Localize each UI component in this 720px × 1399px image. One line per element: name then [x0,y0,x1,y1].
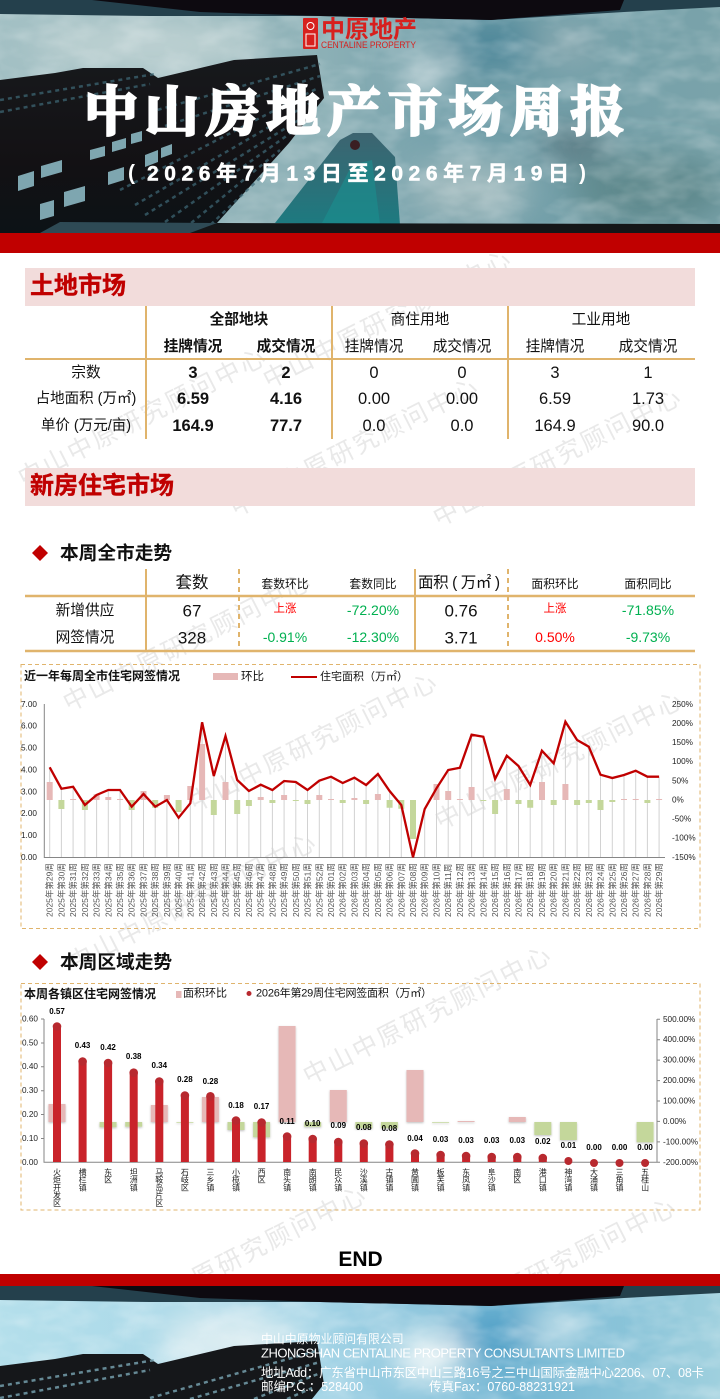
district labels: 三角镇 [615,1168,624,1192]
week labels: 2026年第03周 [349,863,359,917]
table values: 2 [281,364,291,382]
chart legend: 面积环比 [183,986,227,1000]
week labels: 2026年第08周 [408,863,418,917]
title: 中山房地产市场周报 [84,70,631,146]
district labels: 古镇镇 [385,1167,394,1192]
week labels: 2026年第02周 [338,863,348,917]
table group headers: 成交情况 [619,337,678,355]
week labels: 2025年第35周 [115,863,125,917]
row: online signing: 网签情况 [56,629,115,646]
week labels: 2026年第12周 [455,863,465,917]
week labels: 2026年第05周 [373,863,383,917]
area columns [53,1026,547,1162]
week labels: 2026年第15周 [490,863,500,917]
left axis labels: 3.00 [21,787,37,796]
right axis labels: 100.00% [663,1096,695,1106]
week labels: 2025年第31周 [68,863,78,917]
right axis labels: -200.00% [663,1158,698,1167]
table group headers: 全部地块 [210,310,269,328]
week labels: 2026年第07周 [396,863,406,917]
right axis labels: 300.00% [663,1056,695,1065]
district labels: 沙溪镇 [359,1168,368,1192]
week labels: 2025年第47周 [256,863,266,917]
district labels: 三乡镇 [206,1168,215,1192]
value labels: 0.11 [280,1117,295,1126]
week labels: 2026年第23周 [584,863,594,917]
section heading: land market [25,268,695,306]
week labels: 2025年第37周 [138,863,148,917]
right axis labels: 50% [672,776,688,785]
footer buildings [0,1286,720,1399]
value labels: 0.28 [177,1075,193,1084]
district labels: 坦洲镇 [129,1168,138,1192]
week labels: 2026年第28周 [642,863,652,917]
axes [41,1019,660,1162]
watermark: 中山中原研究顾问中心 [59,567,317,717]
row: online signing: 328 [178,628,206,648]
row: online signing: -0.91% [263,629,307,645]
value labels: 0.02 [535,1137,551,1146]
district labels: 马鞍岛片区 [155,1168,164,1207]
negative change bars [100,1122,654,1142]
district labels: 西区 [257,1168,266,1184]
table values: 4.16 [270,390,302,408]
left axis labels: 0.20 [22,1110,38,1119]
value labels: 0.17 [254,1102,270,1111]
section heading: land market: 土地市场 [30,272,126,300]
right axis labels: 0% [672,796,684,804]
district labels: 阜沙镇 [487,1167,496,1192]
week labels: 2025年第42周 [197,863,207,917]
week labels: 2026年第01周 [326,863,336,917]
logo: CENTALINE PROPERTY [321,40,417,51]
row: online signing: 3.71 [444,628,478,648]
table row labels [36,363,136,434]
district labels: 大涌镇 [590,1167,598,1192]
value labels [49,1007,653,1152]
week labels: 2025年第38周 [150,863,160,917]
chart panel: weekly city signing [20,664,700,929]
chart legend [213,669,408,683]
right axis labels: 100% [672,757,693,766]
footer banner [0,1286,720,1399]
table values: 0.00 [446,390,478,408]
week labels: 2025年第52周 [314,863,324,917]
table headers: 面积同比 [624,577,672,591]
left axis labels: 7.00 [21,700,37,709]
week labels: 2026年第21周 [560,863,570,917]
value labels: 0.03 [433,1135,449,1144]
week labels: 2026年第04周 [361,863,371,917]
week labels: 2025年第51周 [302,863,312,917]
table group headers: 挂牌情况 [526,338,585,355]
district labels: 横栏镇 [78,1167,87,1192]
week labels: 2026年第11周 [443,864,453,917]
week labels: 2025年第49周 [279,863,289,917]
footer company text: ZHONGSHAN CENTALINE PROPERTY CONSULTANTS LIMITED [261,1346,625,1360]
footer company text [261,1332,704,1394]
value labels: 0.57 [49,1007,65,1016]
footer company text: 中山中原物业顾问有限公司 [261,1332,404,1346]
chart legend [176,986,432,1000]
value labels: 0.03 [458,1136,474,1145]
table values: 0 [369,364,379,382]
district labels [52,1167,650,1207]
left axis labels: 0.60 [22,1014,38,1024]
value labels: 0.01 [561,1141,577,1150]
watermark: 中山中原研究顾问中心 [226,372,484,522]
table row labels: 占地面积 (万㎡) [36,390,136,407]
value labels: 0.43 [75,1041,91,1050]
negative change bars [58,800,650,839]
end marker: END [338,1248,383,1271]
right axis labels: -150% [672,853,696,862]
chart legend: 住宅面积（万㎡） [320,669,408,683]
value labels: 0.00 [637,1143,653,1152]
header banner [0,0,720,233]
week labels: 2025年第34周 [103,863,113,917]
week labels: 2025年第50周 [291,863,301,917]
week labels: 2025年第44周 [220,863,230,917]
district labels: 神湾镇 [564,1167,573,1192]
table row labels: 宗数 [71,363,101,381]
watermark: 中山中原研究顾问中心 [429,382,687,532]
table row labels: 单价 (万元/亩) [41,416,131,434]
chart title: 近一年每周全市住宅网签情况 [24,668,180,683]
table values: 1.73 [632,390,664,408]
week labels: 2025年第39周 [162,863,172,917]
row: new supply: -71.85% [622,602,674,618]
week labels: 2026年第19周 [537,863,547,917]
watermark: 中山中原研究顾问中心 [14,342,272,492]
district labels: 小榄镇 [232,1168,240,1192]
date range: ) [579,162,586,184]
week labels: 2026年第18周 [525,863,535,917]
chart title: 本周各镇区住宅网签情况 [24,986,156,1001]
row: online signing: -9.73% [626,629,670,645]
value labels: 0.10 [305,1119,321,1128]
district labels: 南头镇 [283,1167,292,1192]
district labels: 东凤镇 [462,1167,471,1192]
table headers: 套数环比 [261,577,309,591]
right axis labels [663,1015,698,1167]
table values: 3 [188,364,198,382]
footer company text: 地址Add：广东省中山市东区中山三路16号之三中山国际金融中心2206、07、08卡 [261,1365,704,1380]
watermark: 中山中原研究顾问中心 [64,827,322,977]
right axis labels: 500.00% [663,1015,695,1024]
footer company text: 传真Fax：0760-88231921 [429,1379,575,1394]
left axis labels: 0.10 [22,1134,38,1143]
week labels: 2025年第45周 [232,863,242,917]
left axis labels: 0.00 [21,853,37,862]
value labels: 0.34 [152,1061,168,1070]
left axis labels: 4.00 [21,766,37,774]
district labels: 石岐区 [180,1168,189,1191]
footer company text: 邮编P.C.：528400 [261,1379,363,1394]
positive change bars [47,744,662,800]
watermark: 中山中原研究顾问中心 [185,667,443,817]
week labels: 2025年第48周 [267,863,277,917]
table group headers: 工业用地 [572,311,631,328]
week labels: 2026年第17周 [514,863,524,917]
week labels [45,863,664,917]
table headers: 面积 ( 万㎡ ) [418,574,500,592]
table group headers: 成交情况 [433,337,492,355]
city trend table [25,569,695,652]
district labels: 火炬开发区 [52,1168,62,1207]
left axis labels: 5.00 [21,744,37,752]
right axis labels: -100.00% [663,1137,698,1146]
row: new supply: 67 [183,602,201,620]
left axis labels: 0.30 [22,1086,38,1095]
table values: 3 [550,364,560,382]
table headers [176,573,672,592]
table values: 77.7 [270,417,302,435]
subheading: city trend: 本周全市走势 [60,542,172,564]
left axis labels [22,1014,38,1167]
left axis labels: 6.00 [21,722,37,731]
table values [172,364,664,435]
right axis labels: 200.00% [663,1076,695,1085]
axes [44,704,665,858]
table group headers: 挂牌情况 [164,337,223,355]
chart legend: 2026年第29周住宅网签面积（万㎡） [256,986,432,1000]
value labels: 0.00 [586,1143,602,1152]
week labels: 2026年第13周 [467,863,477,917]
week labels: 2026年第06周 [385,863,395,917]
row: new supply: 新增供应 [56,601,115,619]
week labels: 2025年第30周 [56,863,66,917]
table group headers: 挂牌情况 [345,338,404,355]
area dots [53,1022,649,1167]
date range: ( [128,162,135,184]
week labels: 2026年第10周 [432,863,442,917]
week labels: 2026年第16周 [502,863,512,917]
subheading: district trend: 本周区域走势 [60,952,172,972]
week labels: 2026年第20周 [549,863,559,917]
table values: 0.0 [451,417,473,435]
left axis labels [21,700,37,862]
date range: 2026年7月13日至2026年7月19日 [147,162,569,186]
right axis labels [672,700,696,862]
chart panel: district signing [20,983,700,1210]
watermark: 中山中原研究顾问中心 [299,940,557,1090]
value labels: 0.00 [612,1143,628,1152]
district labels: 黄圃镇 [410,1167,420,1192]
logo: 中原地产 [321,16,417,44]
week labels: 2026年第27周 [631,863,641,917]
chart legend: 环比 [241,670,264,683]
row: new supply: 上涨 [274,602,297,615]
value labels: 0.04 [407,1134,423,1143]
row: new supply: -72.20% [347,602,399,618]
week labels: 2026年第25周 [607,863,617,917]
table group headers: 成交情况 [257,337,316,355]
week labels: 2025年第33周 [92,863,102,917]
right axis labels: -100% [672,834,696,843]
value labels: 0.08 [356,1123,372,1132]
district labels: 南区 [513,1167,522,1184]
left axis labels: 0.40 [22,1062,38,1071]
district labels: 南朗镇 [308,1167,317,1192]
right axis labels: -50% [672,814,691,824]
value labels: 0.28 [203,1077,219,1086]
left axis labels: 0.00 [22,1158,38,1167]
table headers: 套数同比 [349,577,397,591]
logo [303,16,417,51]
district labels: 五桂山 [641,1168,650,1192]
district labels: 港口镇 [538,1167,547,1192]
week labels: 2026年第09周 [420,863,430,917]
value labels: 0.08 [382,1124,398,1133]
drop lines [50,722,659,857]
table group headers [164,310,678,355]
value labels: 0.42 [100,1043,116,1052]
week labels: 2025年第32周 [80,863,90,917]
table values: 90.0 [632,417,664,435]
area line [50,722,659,857]
footer red band [0,1274,720,1286]
section heading: new housing market: 新房住宅市场 [30,472,174,500]
week labels: 2026年第22周 [572,863,582,917]
week labels: 2025年第36周 [127,863,137,917]
table values: 0.00 [358,390,390,408]
district labels: 民众镇 [334,1168,343,1192]
row: online signing: -12.30% [347,629,399,645]
value labels: 0.18 [228,1101,244,1110]
table values: 164.9 [534,417,576,435]
table values: 164.9 [172,417,214,435]
watermark: 中山中原研究顾问中心 [114,1180,372,1330]
value labels: 0.38 [126,1052,142,1061]
table headers: 面积环比 [531,577,579,591]
value labels: 0.03 [510,1136,526,1145]
table values: 6.59 [539,390,571,408]
left axis labels: 2.00 [21,809,37,818]
header buildings [0,0,720,233]
right axis labels: 0.00% [663,1117,686,1126]
right axis labels: 200% [672,719,693,728]
row: online signing: 0.50% [535,629,575,645]
row: online signing [56,628,670,648]
table values: 0 [457,364,467,382]
week labels: 2025年第29周 [45,863,55,917]
section heading: new housing market [25,468,695,506]
week labels: 2025年第43周 [209,863,219,917]
header red band [0,233,720,253]
left axis labels: 0.50 [22,1038,38,1048]
week labels: 2026年第26周 [619,863,629,917]
week labels: 2026年第24周 [596,863,606,917]
table values: 1 [643,364,653,382]
right axis labels: 150% [672,738,693,747]
land market table [25,306,695,439]
week labels: 2025年第40周 [174,863,184,917]
row: new supply: 上涨 [544,602,567,615]
right axis labels: 250% [672,700,693,709]
watermark: 中山中原研究顾问中心 [424,1192,682,1342]
table group headers: 商住用地 [391,311,450,328]
week labels: 2025年第41周 [185,863,195,917]
district labels: 东区 [104,1167,113,1184]
week labels: 2026年第29周 [654,863,664,917]
positive change bars [48,1026,526,1122]
right axis labels: 400.00% [663,1035,695,1044]
watermark: 中山中原研究顾问中心 [431,685,689,835]
table headers: 套数 [176,573,209,592]
table values: 0.0 [363,417,385,435]
left axis labels: 1.00 [21,831,37,840]
value labels: 0.09 [331,1121,347,1130]
row: new supply: 0.76 [444,602,478,620]
week labels: 2025年第46周 [244,863,254,917]
value labels: 0.03 [484,1136,500,1145]
row: new supply [56,601,674,620]
watermark: 中山中原研究顾问中心 [259,244,517,394]
week labels: 2026年第14周 [478,863,488,917]
table values: 6.59 [177,390,209,408]
district labels: 板芙镇 [436,1167,445,1192]
